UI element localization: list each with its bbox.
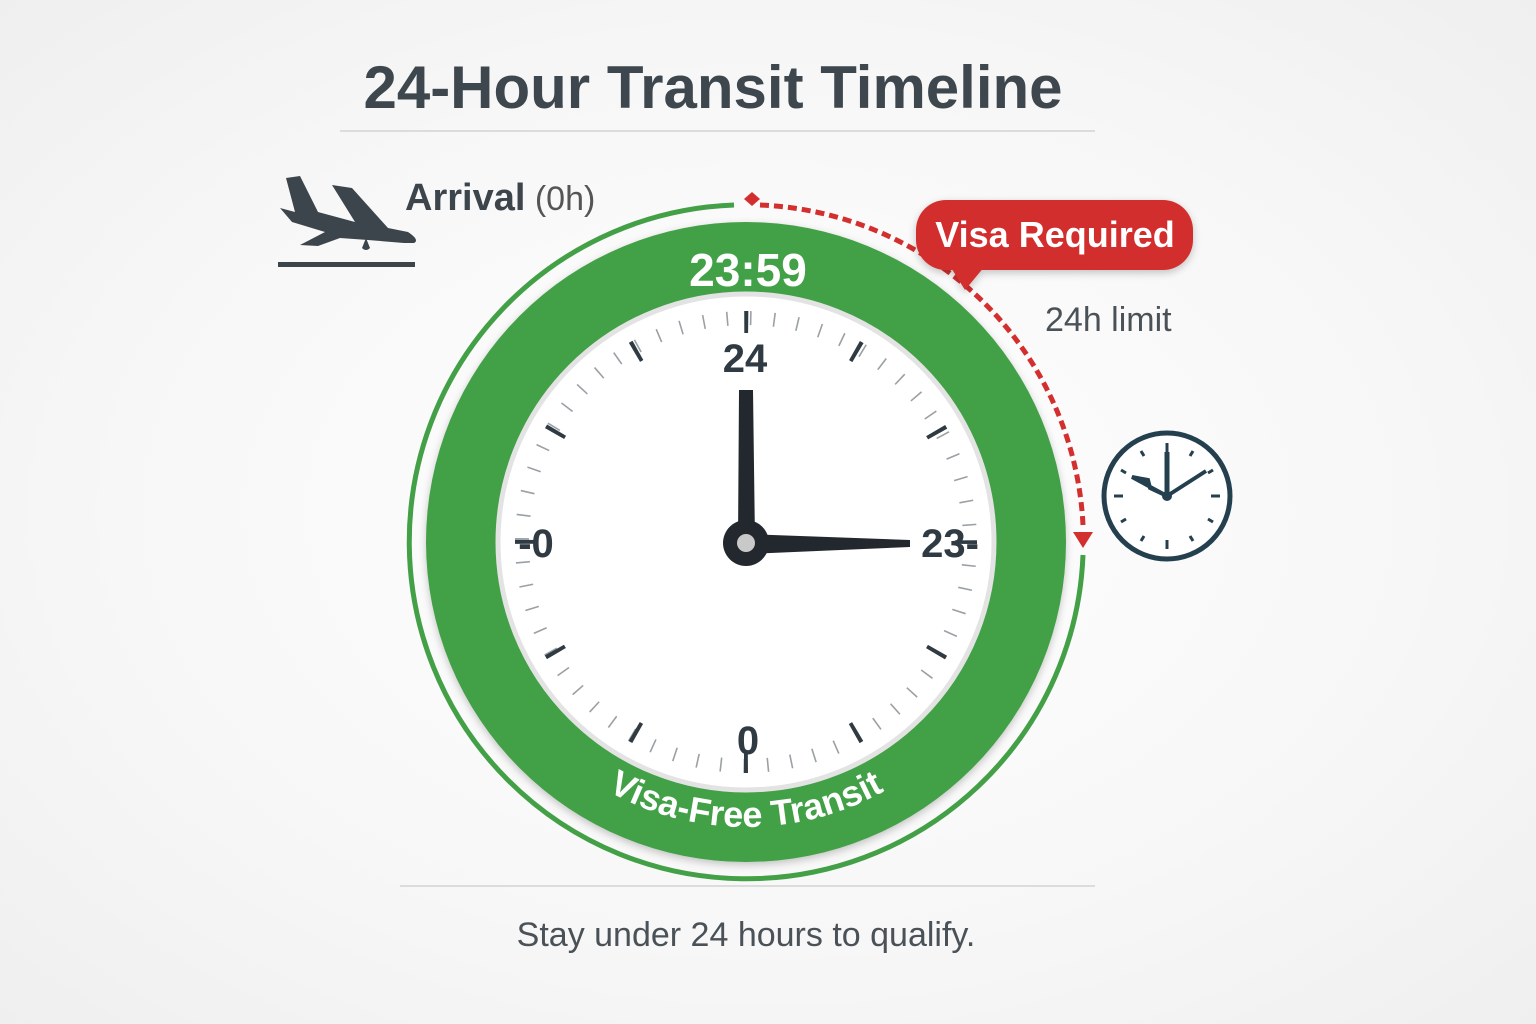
dial numbers: -0 <box>518 522 554 566</box>
minor ticks <box>522 318 970 766</box>
23:59 label: 23:59 <box>689 244 807 296</box>
dial numbers: 0 <box>737 719 759 763</box>
hands <box>738 390 755 542</box>
visa-free transit curved label: Visa-Free Transit <box>616 769 884 828</box>
dial numbers: 23- <box>921 522 979 566</box>
arrival label: Arrival (0h) <box>405 177 595 219</box>
dial numbers: 24 <box>723 337 768 381</box>
dial numbers <box>518 337 979 763</box>
major ticks <box>526 322 966 762</box>
red dashed arc: visa required <box>744 192 1093 548</box>
callout: visa required: Visa Required <box>935 214 1175 255</box>
24h limit label: 24h limit <box>1045 301 1172 339</box>
clock dial <box>422 221 1070 869</box>
icon: arriving plane <box>278 176 416 267</box>
callout: visa required <box>916 200 1193 290</box>
footer note: Stay under 24 hours to qualify. <box>517 916 975 954</box>
outer green arc <box>409 205 1083 879</box>
icon: small clock <box>1104 433 1230 559</box>
title: 24-Hour Transit Timeline <box>363 54 1063 121</box>
